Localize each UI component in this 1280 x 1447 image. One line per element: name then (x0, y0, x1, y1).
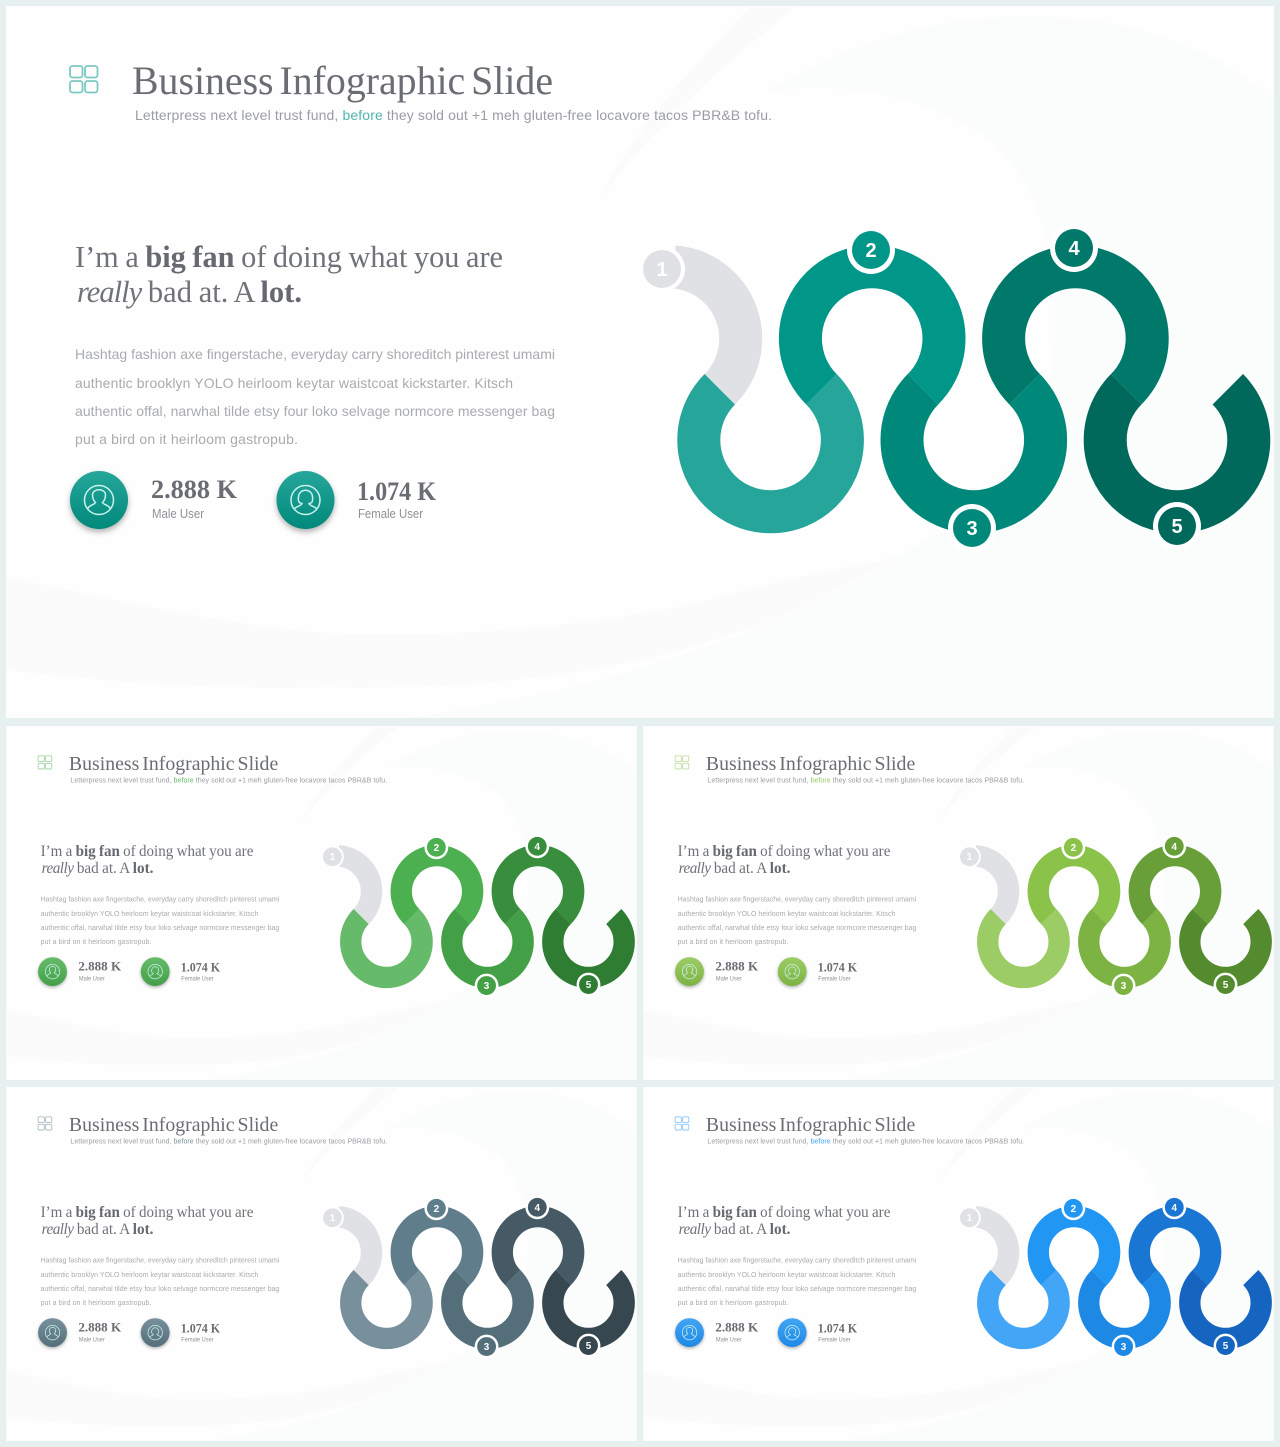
badge 2: 2 (1071, 1204, 1077, 1215)
wave segment 6 (1190, 1278, 1261, 1338)
stat: female user: 1.074 K (181, 1321, 220, 1336)
text block: put a bird on it heirloom gastropub. (678, 1300, 789, 1307)
text block (41, 1258, 280, 1307)
heading: really bad at. A lot. (679, 1221, 791, 1238)
chart: wave (321, 834, 624, 997)
badge 4: 4 (535, 1203, 541, 1214)
badge 2 (847, 226, 895, 274)
wave segment 6 (553, 917, 624, 977)
stat: male user: 2.888 K (78, 1320, 121, 1335)
title: Business Infographic Slide (706, 1114, 915, 1136)
badge 1 (958, 845, 981, 868)
badge 4 (1050, 224, 1098, 272)
wave segment 1 (338, 856, 372, 917)
badge 3 (475, 1335, 498, 1358)
wave segment 6 (553, 1278, 624, 1338)
text block: Hashtag fashion axe fingerstache, everyday carry shoreditch pinterest umami (41, 1258, 280, 1265)
heading (41, 1204, 254, 1238)
badge 2: 2 (1071, 843, 1077, 854)
heading: I’m a big fan of doing what you are (678, 843, 891, 860)
stat: male user: 2.888 K (715, 959, 758, 974)
stat: female user: Female User (181, 1337, 214, 1344)
title: Business Infographic Slide (69, 753, 278, 775)
chart: wave (958, 1195, 1261, 1358)
wave segment 5 (1139, 1217, 1211, 1278)
badge 1 (321, 845, 344, 868)
heading (678, 1204, 891, 1238)
stat: female user: Female User (818, 1337, 851, 1344)
stat: male user (38, 1318, 121, 1347)
wave segment 1 (674, 267, 741, 389)
stat: male user: 2.888 K (715, 1320, 758, 1335)
subtitle: Letterpress next level trust fund, before they sold out +1 meh gluten-free locavore tacos PBR&B tofu. (707, 1139, 1024, 1146)
badge 5: 5 (1223, 1341, 1229, 1352)
heading: I’m a big fan of doing what you are (41, 843, 254, 860)
badge 1 (639, 246, 685, 292)
wave segment 2 (351, 1278, 422, 1338)
stat: male user (70, 471, 238, 529)
badge 2: 2 (434, 843, 440, 854)
badge 3 (948, 504, 996, 552)
text block: put a bird on it heirloom gastropub. (41, 1300, 152, 1307)
text block: authentic offal, narwhal tilde etsy four loko selvage normcore messenger bag (41, 1286, 279, 1293)
wave segment 5 (502, 1217, 574, 1278)
wave segment 4 (1089, 1278, 1160, 1338)
wave segment 2 (988, 917, 1059, 977)
text block: put a bird on it heirloom gastropub. (41, 939, 152, 946)
badge 2 (1061, 835, 1085, 859)
stat: female user: 1.074 K (818, 960, 857, 975)
wave segment 6 (1190, 917, 1261, 977)
badge 2 (1061, 1196, 1085, 1220)
wave segment 1 (338, 1217, 372, 1278)
badge 1: 1 (330, 852, 336, 863)
badge 3: 3 (484, 1342, 490, 1353)
stat: male user (38, 957, 121, 986)
badge 5 (577, 1334, 600, 1357)
wave segment 2 (351, 917, 422, 977)
text block: authentic offal, narwhal tilde etsy four loko selvage normcore messenger bag (678, 925, 916, 932)
wave segment 5 (502, 856, 574, 917)
panel: slate slide (6, 1087, 637, 1441)
heading: I’m a big fan of doing what you are (75, 239, 503, 274)
panel: lime slide (643, 726, 1274, 1080)
badge 2: 2 (865, 240, 877, 262)
text block (75, 346, 555, 447)
wave segment 1 (975, 856, 1009, 917)
icon: grid (38, 1117, 52, 1130)
subtitle: Letterpress next level trust fund, before they sold out +1 meh gluten-free locavore tacos PBR&B tofu. (707, 778, 1024, 785)
stat: female user: Female User (358, 507, 423, 521)
stat: male user: Male User (152, 507, 204, 521)
badge 5 (1214, 973, 1237, 996)
heading: really bad at. A lot. (77, 274, 302, 309)
wave segment 6 (1105, 389, 1249, 512)
badge 3 (1112, 974, 1136, 997)
badge 4 (1162, 1195, 1186, 1219)
wave segment 3 (1038, 1217, 1110, 1278)
text block: authentic brooklyn YOLO heirloom keytar waistcoat kickstarter. Kitsch (75, 375, 513, 391)
badge 1: 1 (656, 259, 668, 281)
badge 5: 5 (586, 1341, 592, 1352)
badge 5 (577, 973, 600, 996)
badge 2 (424, 835, 448, 859)
wave segment 4 (1089, 917, 1160, 977)
badge 4: 4 (1068, 238, 1080, 260)
badge 1: 1 (967, 852, 973, 863)
stat: male user: Male User (79, 976, 105, 983)
stat: female user (141, 957, 220, 986)
badge 3: 3 (484, 981, 490, 992)
badge 2: 2 (434, 1204, 440, 1215)
text block: authentic brooklyn YOLO heirloom keytar waistcoat kickstarter. Kitsch (41, 911, 258, 918)
badge 4 (525, 1195, 549, 1219)
title: Business Infographic Slide (706, 753, 915, 775)
badge 3: 3 (1121, 981, 1127, 992)
text block (41, 897, 280, 946)
stat: male user: Male User (716, 976, 742, 983)
heading: really bad at. A lot. (679, 860, 791, 877)
chart: wave (958, 834, 1261, 997)
badge 4 (525, 834, 549, 858)
badge 1 (321, 1206, 344, 1229)
text block: Hashtag fashion axe fingerstache, everyday carry shoreditch pinterest umami (678, 897, 917, 904)
subtitle: Letterpress next level trust fund, before they sold out +1 meh gluten-free locavore tacos PBR&B tofu. (135, 107, 772, 123)
title: Business Infographic Slide (69, 1114, 278, 1136)
text block: authentic brooklyn YOLO heirloom keytar waistcoat kickstarter. Kitsch (41, 1272, 258, 1279)
badge 3: 3 (1121, 1342, 1127, 1353)
stat: female user (778, 957, 857, 986)
wave segment 4 (452, 1278, 523, 1338)
badge 4: 4 (1172, 842, 1178, 853)
heading (75, 239, 503, 309)
badge 1: 1 (967, 1213, 973, 1224)
stat: male user: 2.888 K (78, 959, 121, 974)
stat: female user (141, 1318, 220, 1347)
wave segment 2 (699, 389, 842, 512)
wave segment 3 (401, 856, 473, 917)
heading: really bad at. A lot. (42, 1221, 154, 1238)
wave segment 3 (1038, 856, 1110, 917)
badge 3 (475, 974, 498, 997)
panel: green slide (6, 726, 637, 1080)
heading (41, 843, 254, 877)
text block: authentic offal, narwhal tilde etsy four loko selvage normcore messenger bag (678, 1286, 916, 1293)
panel: large teal slide (6, 6, 1274, 718)
wave segment 1 (975, 1217, 1009, 1278)
stat: male user: Male User (716, 1337, 742, 1344)
wave segment 4 (452, 917, 523, 977)
text block: put a bird on it heirloom gastropub. (75, 431, 298, 447)
badge 4 (1162, 834, 1186, 858)
stat: female user (276, 471, 437, 529)
stat: male user: Male User (79, 1337, 105, 1344)
text block: Hashtag fashion axe fingerstache, everyday carry shoreditch pinterest umami (41, 897, 280, 904)
stat: male user (675, 957, 758, 986)
badge 5 (1153, 502, 1201, 550)
stat: male user: 2.888 K (151, 475, 238, 504)
text block: authentic brooklyn YOLO heirloom keytar waistcoat kickstarter. Kitsch (678, 911, 895, 918)
subtitle: Letterpress next level trust fund, before they sold out +1 meh gluten-free locavore tacos PBR&B tofu. (70, 778, 387, 785)
stat: male user (675, 1318, 758, 1347)
stat: female user: Female User (181, 976, 214, 983)
stat: female user (778, 1318, 857, 1347)
wave segment 2 (988, 1278, 1059, 1338)
stat: female user: 1.074 K (181, 960, 220, 975)
heading: I’m a big fan of doing what you are (678, 1204, 891, 1221)
badge 5: 5 (1171, 516, 1183, 538)
text block: Hashtag fashion axe fingerstache, everyday carry shoreditch pinterest umami (678, 1258, 917, 1265)
wave segment 3 (401, 1217, 473, 1278)
heading (678, 843, 891, 877)
title: Business Infographic Slide (132, 58, 553, 103)
chart: wave (321, 1195, 624, 1358)
text block: Hashtag fashion axe fingerstache, everyday carry shoreditch pinterest umami (75, 346, 555, 362)
stat: female user: 1.074 K (357, 477, 437, 506)
wave segment 3 (800, 267, 944, 389)
text block (678, 897, 917, 946)
badge 5: 5 (586, 980, 592, 991)
wave segment 4 (902, 389, 1046, 512)
icon: grid (675, 1117, 689, 1130)
text block: put a bird on it heirloom gastropub. (678, 939, 789, 946)
subtitle: Letterpress next level trust fund, before they sold out +1 meh gluten-free locavore tacos PBR&B tofu. (70, 1139, 387, 1146)
badge 5 (1214, 1334, 1237, 1357)
heading: I’m a big fan of doing what you are (41, 1204, 254, 1221)
badge 5: 5 (1223, 980, 1229, 991)
text block (678, 1258, 917, 1307)
panel: blue slide (643, 1087, 1274, 1441)
badge 4: 4 (1172, 1203, 1178, 1214)
text block: authentic offal, narwhal tilde etsy four loko selvage normcore messenger bag (41, 925, 279, 932)
badge 2 (424, 1196, 448, 1220)
icon: grid (38, 756, 52, 769)
text block: authentic offal, narwhal tilde etsy four loko selvage normcore messenger bag (75, 403, 555, 419)
icon: grid (70, 66, 98, 92)
stat: female user: Female User (818, 976, 851, 983)
text block: authentic brooklyn YOLO heirloom keytar waistcoat kickstarter. Kitsch (678, 1272, 895, 1279)
badge 3 (1112, 1335, 1136, 1358)
badge 1 (958, 1206, 981, 1229)
icon: grid (675, 756, 689, 769)
stat: female user: 1.074 K (818, 1321, 857, 1336)
wave segment 5 (1139, 856, 1211, 917)
badge 4: 4 (535, 842, 541, 853)
heading: really bad at. A lot. (42, 860, 154, 877)
wave segment 5 (1004, 267, 1147, 389)
badge 3: 3 (966, 518, 978, 540)
chart: wave (639, 224, 1249, 552)
badge 1: 1 (330, 1213, 336, 1224)
